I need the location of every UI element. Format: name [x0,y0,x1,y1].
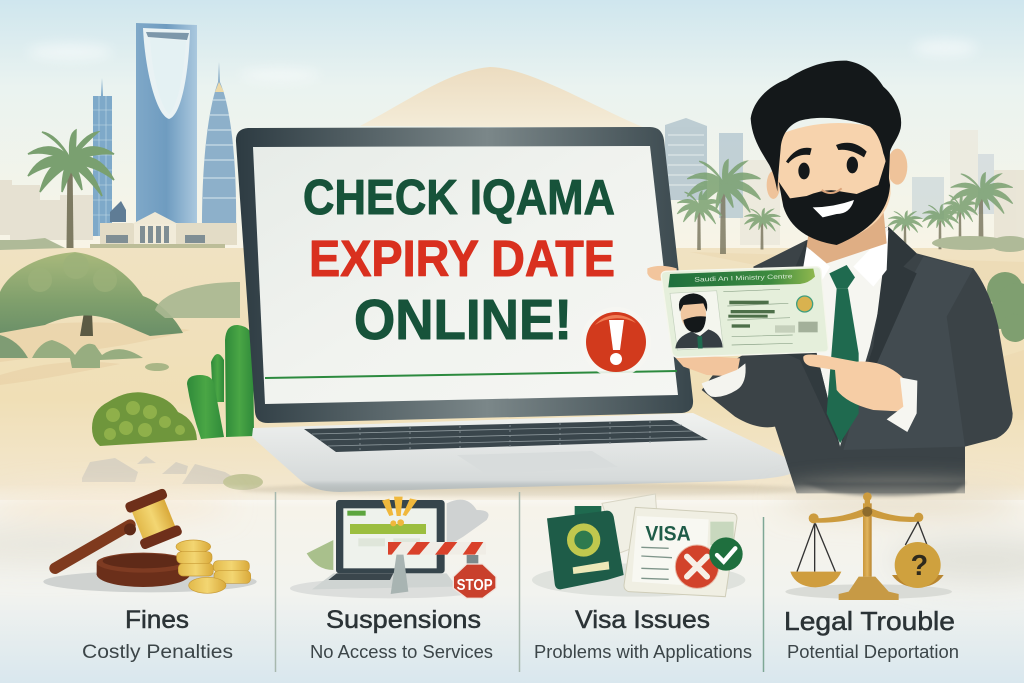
keyboard [304,420,708,452]
card header [668,269,815,287]
divider 1 [274,492,276,672]
icon: passport and visa: VISA [645,522,691,546]
green status line [265,371,677,378]
hair [751,61,901,192]
icon: passport and visa [532,494,745,597]
left hand [647,266,740,377]
skyline: classical building [100,201,237,245]
skyline: kingdom centre tower [136,23,197,225]
panel: visa issues [532,494,752,662]
skyline: faisaliah tower [202,62,236,228]
panel: suspensions [290,497,496,662]
laptop screen [253,146,678,404]
mid-distance shrubs [0,282,240,371]
subtext: fines: Costly Penalties [82,642,233,663]
necktie [827,265,859,443]
clouds [28,40,977,81]
panel: fines [43,488,257,663]
skyline: left hazy city [0,180,93,240]
laptop [236,127,820,497]
ears [887,149,907,185]
icon: scales of justice [785,492,952,600]
iqama card [661,267,828,357]
cactus [187,325,254,439]
man holding iqama card [647,61,1013,493]
icon: blocked laptop: STOP [457,577,493,594]
trackpad [457,451,618,474]
pointing hand [803,354,905,412]
icon: gavel and coins [43,488,257,593]
ground shading [0,252,1024,420]
eyebrows [786,148,812,163]
right cuff [887,377,917,432]
laptop shadow [240,483,820,497]
bottom panel background [0,484,1024,683]
fog [0,490,1024,582]
subtext: suspensions: No Access to Services [310,642,493,662]
icon: blocked laptop [290,497,496,598]
neck [807,210,887,263]
icon: scales of justice: ? [911,550,928,582]
collar [803,230,888,290]
suit [702,227,1013,493]
lapels [763,227,917,447]
laptop screen bezel [236,127,693,423]
foreground rocks [82,456,263,490]
headline line 2: EXPIRY DATE [309,230,615,287]
divider 3 [762,517,764,672]
divider 2 [518,492,520,672]
heading: visa issues: Visa Issues [575,606,710,634]
headline line 3: ONLINE! [354,288,572,352]
beard [779,160,890,245]
card photo [670,291,723,350]
sand ground [0,248,1024,500]
laptop base [252,413,795,492]
palm: left large [28,130,114,248]
subtext: visa issues: Problems with Applications [534,642,752,662]
distant sand dune [360,67,645,128]
eyes [798,163,810,179]
palm: right group [677,160,1013,254]
warning badge [581,307,651,377]
headline [303,171,615,352]
left cuff [702,363,746,397]
acacia tree [0,252,183,336]
subtext: legal trouble: Potential Deportation [787,642,959,662]
head [751,61,907,263]
green bush [92,392,197,446]
heading: suspensions: Suspensions [326,606,481,634]
sky background [0,0,1024,250]
smile [813,200,854,217]
headline line 1: CHECK IQAMA [303,171,615,225]
card emblem [797,296,813,312]
distant shrubs [0,236,1024,252]
right shrub [986,272,1024,342]
card data lines [728,301,818,333]
skyline: slim glass tower [93,78,112,236]
nose [822,188,842,193]
shirt [807,227,888,447]
residual suit fade [800,482,966,496]
face [775,123,891,243]
skyline: right towers [665,118,1024,245]
heading: fines: Fines [125,606,189,634]
panel: legal trouble [784,492,959,662]
card title: Saudi An I Ministry Centre [694,273,793,284]
heading: legal trouble: Legal Trouble [784,606,955,636]
